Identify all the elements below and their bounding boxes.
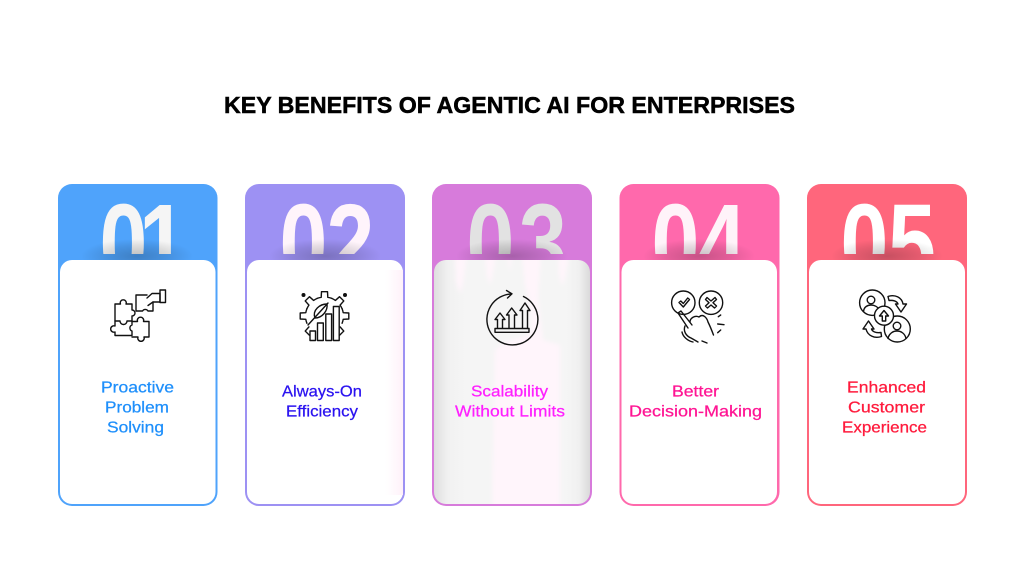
pale pink streaks on card 3 — [455, 255, 569, 515]
number shadow — [269, 239, 381, 273]
label: Without Limits — [455, 404, 565, 420]
number shadow — [456, 239, 568, 273]
number 01: 01 — [100, 182, 187, 304]
label — [101, 380, 174, 436]
icon: gear and growth bars — [300, 292, 349, 340]
card 2 header background — [245, 184, 405, 506]
card 1 header background — [58, 184, 218, 506]
label: Better — [672, 384, 720, 400]
label: Efficiency — [286, 404, 358, 420]
label: Experience — [842, 420, 927, 436]
card 1 body — [60, 260, 216, 504]
number 03: 03 — [466, 182, 567, 304]
panel: card 5 enhanced customer experience — [807, 182, 967, 506]
label — [842, 380, 927, 436]
label: Always-On — [282, 384, 362, 400]
panel: card 1 proactive problem solving — [58, 182, 218, 506]
label: Solving — [107, 420, 164, 436]
label: Problem — [105, 400, 169, 416]
number shadow — [81, 239, 193, 273]
card 2 body — [247, 260, 403, 504]
faint sheen on card 2 — [385, 270, 403, 495]
label — [455, 384, 565, 420]
panel: card 4 better decision-making — [620, 182, 780, 506]
card 4 header background — [620, 184, 780, 506]
card 4 body — [622, 260, 777, 504]
card 3 header background — [432, 184, 592, 506]
number 04: 04 — [652, 182, 746, 304]
label — [629, 384, 762, 420]
card 3 body — [434, 260, 590, 504]
panel: card 3 scalability without limits — [432, 182, 592, 515]
label: Enhanced — [847, 380, 926, 396]
label: Customer — [848, 400, 926, 416]
panel: card 2 always-on efficiency — [245, 182, 405, 506]
icon: rising arrows in circular arrow — [487, 290, 538, 345]
number shadow — [643, 239, 755, 273]
icon: check and cross choice with hand — [672, 291, 724, 343]
label: Decision-Making — [629, 404, 762, 420]
icon: customers with cycling arrows — [860, 290, 910, 342]
number 02: 02 — [280, 182, 374, 304]
number 05: 05 — [840, 182, 936, 304]
label — [282, 384, 362, 420]
label: Scalability — [471, 384, 548, 400]
card 5 body — [809, 260, 965, 504]
card 5 header background — [807, 184, 967, 506]
icon: puzzle pieces and hand — [111, 290, 166, 341]
number shadow — [831, 239, 943, 273]
label: Proactive — [101, 380, 174, 396]
title: KEY BENEFITS OF AGENTIC AI FOR ENTERPRISES — [224, 92, 795, 118]
